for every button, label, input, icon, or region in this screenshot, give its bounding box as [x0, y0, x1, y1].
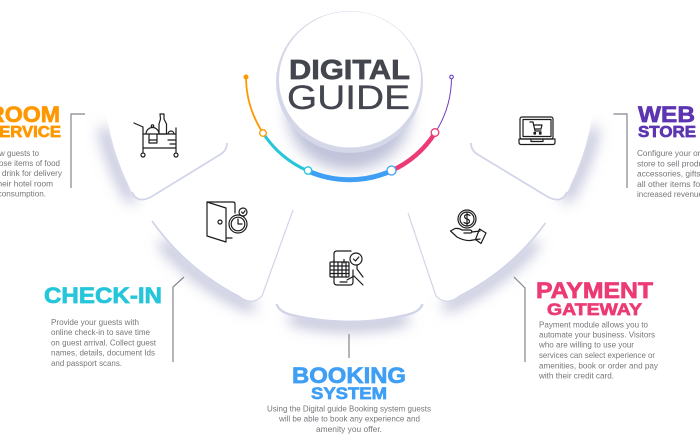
text: check-in description: names, details, document Ids [51, 348, 156, 358]
icon: room service trolley [134, 114, 178, 157]
heading: booking system: BOOKING [292, 363, 406, 388]
panel: room service [0, 80, 227, 200]
icon: laptop with cart [519, 117, 555, 144]
heading: check-in: CHECK-IN [44, 283, 162, 308]
card: booking system [276, 195, 423, 322]
text: booking system description [267, 404, 432, 434]
card: room service [104, 80, 227, 199]
panel: payment gateway [408, 175, 659, 380]
heading: web store: WEB [638, 102, 695, 127]
text: booking system description: will be able to book any experience and [278, 414, 420, 424]
connector: web store [614, 114, 627, 188]
text: booking system description: amenity you offer. [316, 424, 382, 434]
text: web store description [637, 148, 700, 199]
text: check-in description: Provide your guests with [51, 317, 139, 327]
title: guide: GUIDE [287, 79, 410, 117]
title: digital: DIGITAL [289, 54, 410, 85]
icon: phone calendar booking [330, 251, 363, 285]
text: check-in description: and passport scans. [51, 358, 122, 368]
icon: door with clock [207, 202, 247, 242]
heading: room service [0, 102, 61, 141]
connector: check-in [173, 277, 184, 362]
heading: payment gateway: PAYMENT [536, 278, 654, 303]
connector: payment gateway [514, 277, 525, 362]
text: payment gateway description: with their credit card. [538, 370, 614, 380]
text: payment gateway description [538, 319, 659, 380]
icon: hand holding coin [450, 210, 486, 244]
heading: booking system [292, 363, 406, 403]
text: check-in description: online check-in to save time [51, 327, 150, 337]
center circle: digital guide [276, 11, 423, 170]
text: check-in description [51, 317, 157, 368]
timeline arc with nodes [244, 74, 453, 180]
panel: web store [471, 80, 700, 200]
text: payment gateway description: Payment module allows you to [539, 319, 648, 329]
heading: web store [638, 102, 696, 141]
text: payment gateway description: automate your business. Visitors [539, 329, 656, 339]
text: check-in description: on guest arrival. Collect guest [51, 338, 157, 348]
heading: booking system: SYSTEM [311, 384, 387, 403]
card: check-in [151, 175, 293, 301]
text: payment gateway description: amenities, book or order and pay [539, 360, 659, 370]
text: room service description [0, 148, 63, 198]
card: payment gateway [408, 175, 546, 301]
text: payment gateway description: services can select experience or [539, 350, 655, 360]
panel: check-in [44, 175, 293, 368]
heading: web store: STORE [638, 124, 696, 141]
panel: booking system [267, 195, 432, 434]
heading: payment gateway: GATEWAY [547, 300, 643, 319]
connector: booking system [348, 334, 350, 358]
card: web store [471, 80, 595, 199]
connector: room service [71, 114, 85, 188]
text: payment gateway description: who are willing to use your [538, 340, 634, 350]
heading: payment gateway [536, 278, 654, 319]
text: booking system description: Using the Digital guide Booking system guests [267, 404, 432, 414]
